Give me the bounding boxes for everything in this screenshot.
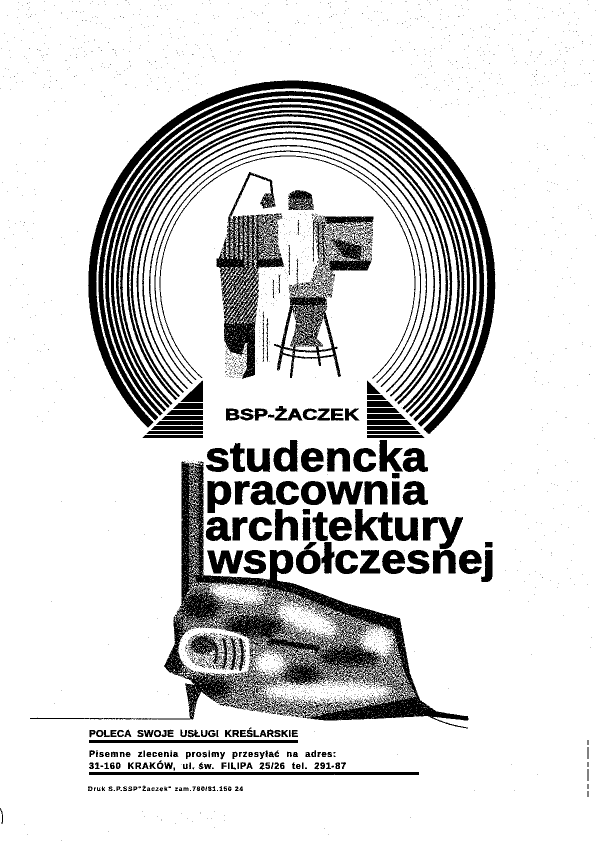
services heading: POLECA SWOJE USŁUGI KREŚLARSKIE (89, 727, 298, 740)
hatched column base (220, 268, 260, 325)
lamp head (260, 193, 276, 208)
right striped triangle (366, 380, 428, 438)
dark rim (193, 573, 470, 723)
contact text: Pisemne zlecenia prosimy przesyłać na adres: (89, 749, 336, 759)
title: studencka (205, 433, 428, 480)
concentric rings (92, 84, 491, 484)
heading: BSP-Żaczek: BSP-ŻACZEK (225, 407, 360, 424)
shadows (162, 595, 380, 698)
highlights (209, 582, 391, 700)
dark bars (217, 258, 284, 267)
head (288, 190, 314, 210)
title (205, 433, 495, 582)
title: współczesnej (207, 535, 495, 582)
corner scan mark (0, 808, 3, 824)
thumbnail (178, 628, 250, 674)
contact rule (89, 772, 419, 775)
scan edge mark (587, 740, 589, 797)
bucket (225, 325, 255, 378)
drawing machine column (217, 213, 284, 325)
title: architektury (205, 502, 464, 549)
lamp arm (230, 173, 272, 217)
body shading (288, 213, 335, 298)
drawing board on the right (325, 217, 373, 262)
stool centre (289, 298, 327, 347)
hand (160, 570, 477, 723)
seated figure body (278, 210, 335, 298)
finger crease (260, 620, 320, 651)
contact text (89, 749, 346, 771)
hand tail lines (30, 711, 468, 728)
figure: draughtsman at drawing board (217, 173, 373, 379)
stool (275, 305, 339, 377)
left striped triangle (140, 380, 204, 438)
stippled panel (258, 214, 292, 260)
print note: Druk S.P.SSP"Żaczek" zam.780/81.150 24 (88, 785, 243, 793)
contact text: 31-160 KRAKÓW, ul. św. FILIPA 25/26 tel. 291-87 (89, 760, 346, 771)
leg (256, 268, 287, 365)
body fold lines (289, 220, 324, 290)
services rule (89, 740, 298, 743)
pen (182, 460, 203, 719)
title: pracownia (205, 466, 428, 513)
